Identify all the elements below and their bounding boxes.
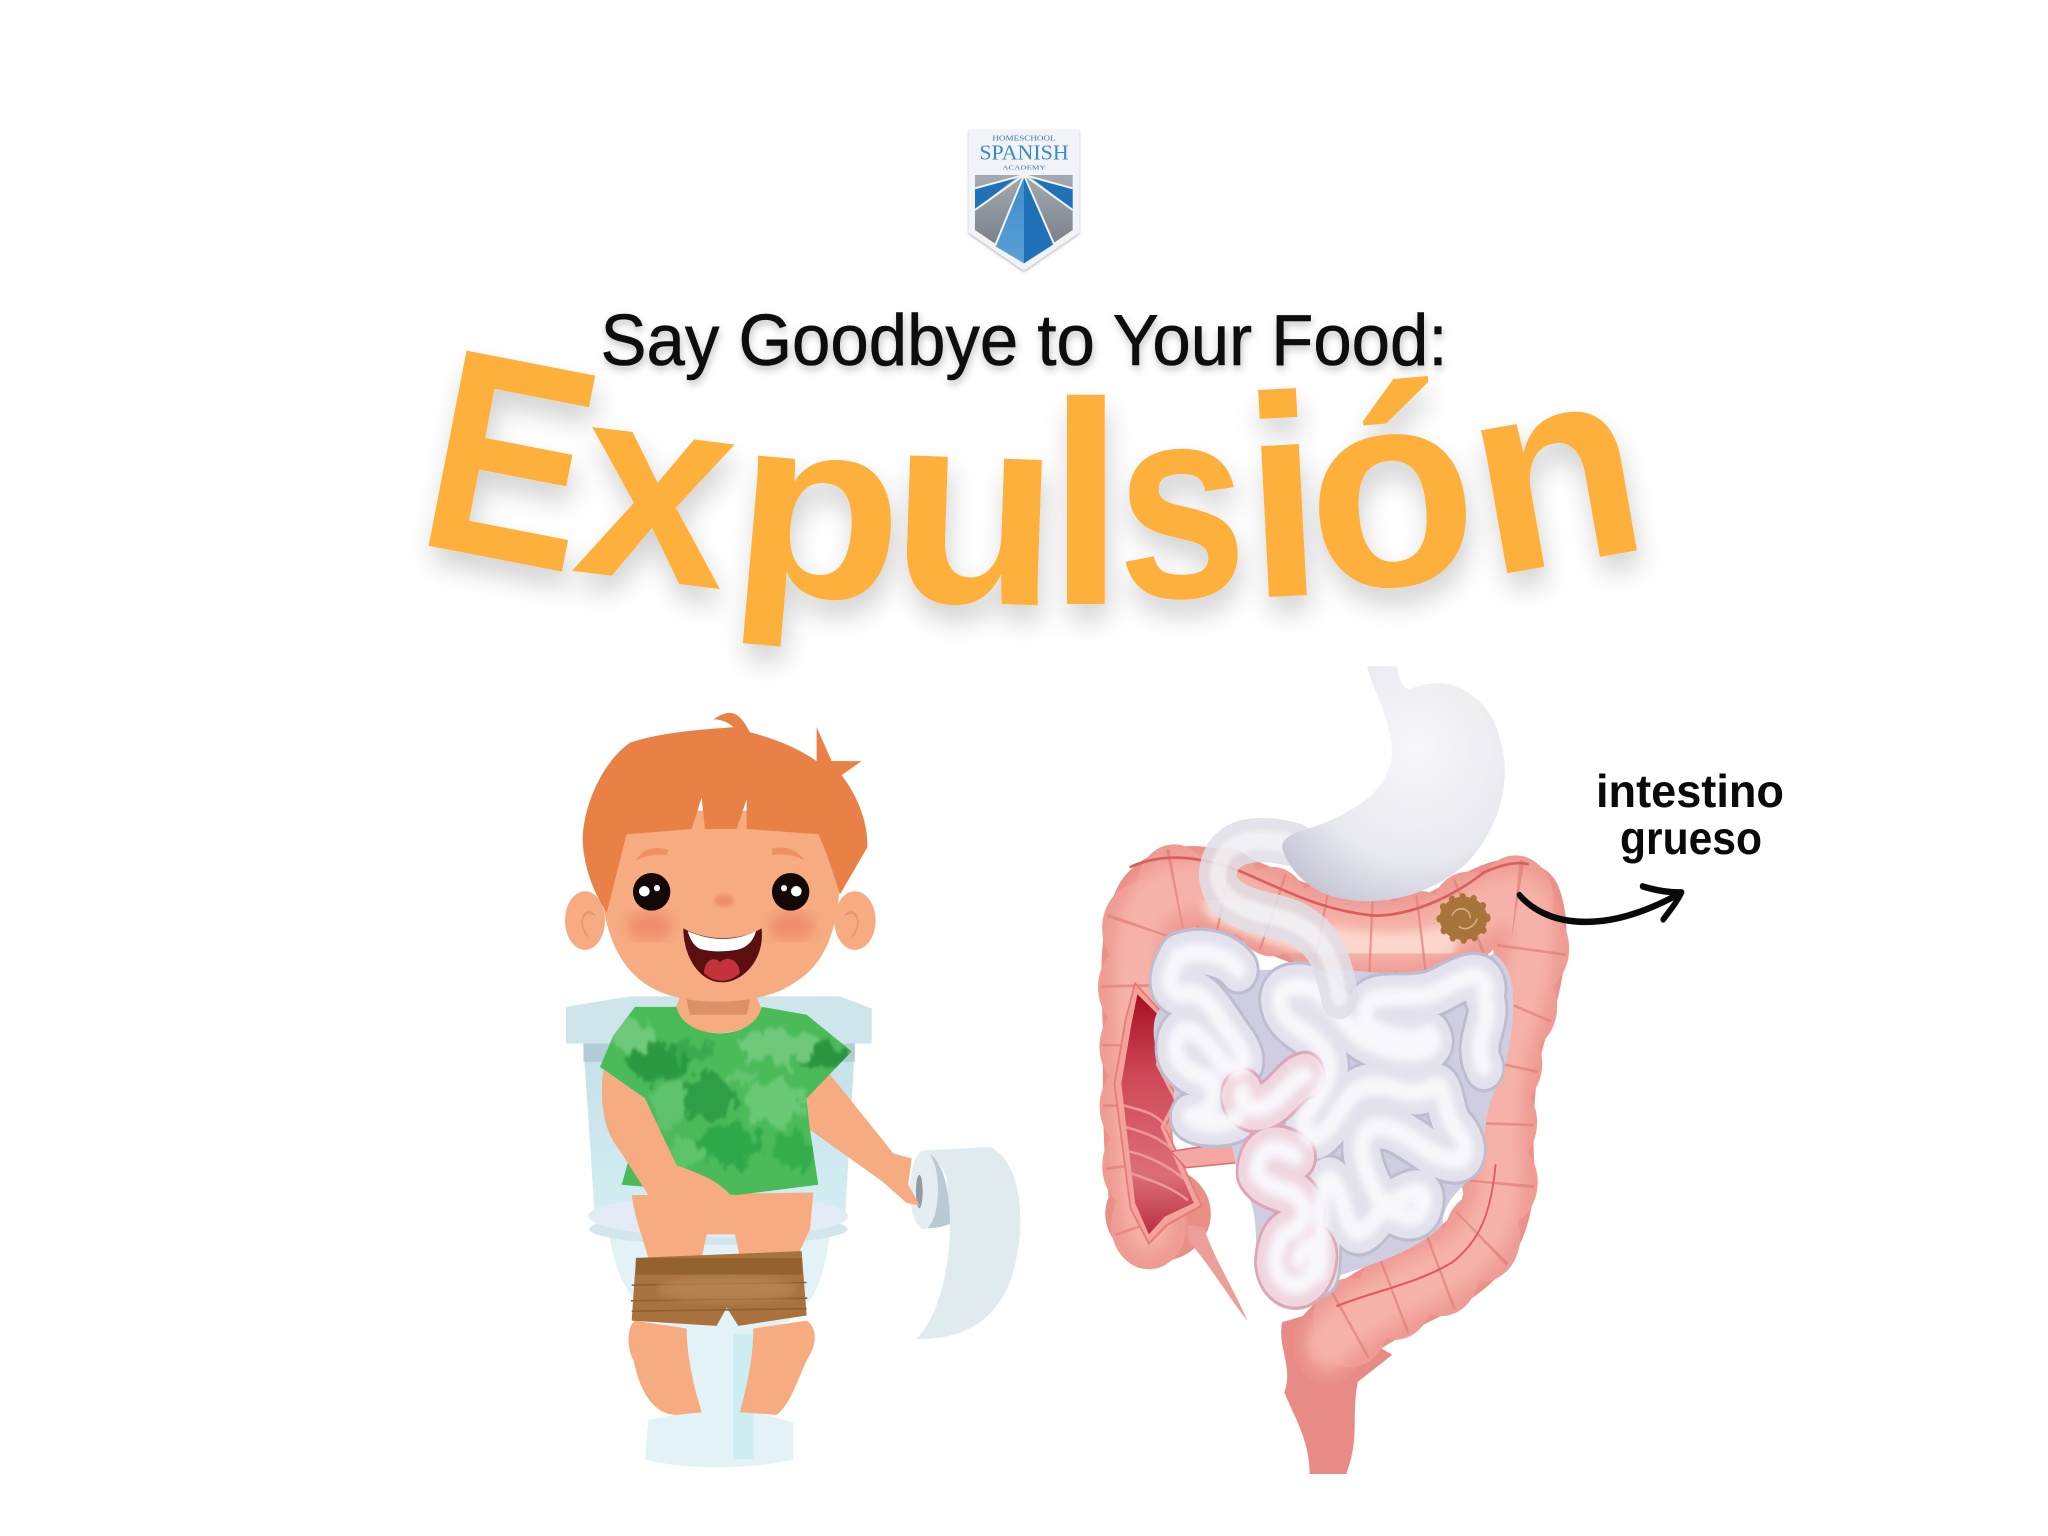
mouth	[683, 928, 762, 982]
neck	[675, 989, 762, 1033]
label: intestino grueso: intestino	[1596, 765, 1784, 817]
toilet	[566, 996, 872, 1467]
legs and feet	[632, 1193, 813, 1258]
title: Expulsión: i	[1236, 336, 1329, 659]
illustration: digestive system	[1105, 666, 1682, 1474]
subtitle: Say Goodbye to Your Food:	[600, 301, 1448, 381]
green shirt	[600, 1007, 853, 1195]
hair	[583, 713, 867, 913]
large intestine	[1105, 858, 1532, 1474]
title: Expulsión	[401, 287, 1664, 665]
left arm with hand	[602, 1070, 733, 1224]
logo: Homeschool Spanish Academy shield: HOMESCHOOL	[992, 134, 1056, 143]
logo: Homeschool Spanish Academy shield: ACADEMY	[1002, 165, 1046, 172]
illustration: boy on toilet	[565, 713, 1020, 1467]
food waste ball	[1440, 897, 1487, 940]
title: Expulsión: n	[1445, 303, 1664, 635]
appendix	[1188, 1225, 1248, 1321]
title: Expulsión: s	[1114, 348, 1249, 657]
toilet paper roll	[910, 1147, 1020, 1339]
logo: Homeschool Spanish Academy shield	[969, 129, 1079, 271]
eyes	[633, 873, 809, 911]
nose	[714, 894, 734, 907]
stomach	[1282, 666, 1505, 901]
label: intestino grueso: grueso	[1620, 812, 1762, 864]
title: Expulsión: ó	[1293, 325, 1488, 652]
ears	[565, 891, 605, 950]
duodenum over colon	[1218, 840, 1339, 997]
label: intestino grueso	[1596, 765, 1784, 864]
title: Expulsión: E	[401, 287, 621, 634]
ileum	[1171, 1141, 1242, 1168]
title: Expulsión: u	[886, 352, 1065, 665]
eyebrows	[636, 848, 805, 860]
title: Expulsión: p	[723, 359, 916, 659]
opened cecum	[1114, 983, 1202, 1244]
cheeks	[627, 912, 815, 939]
pointer arrow	[1519, 886, 1682, 922]
right arm	[807, 1072, 920, 1206]
title: Expulsión: l	[1048, 343, 1124, 665]
logo: Homeschool Spanish Academy shield: SPANISH	[979, 142, 1069, 164]
shorts	[631, 1251, 807, 1326]
face	[600, 811, 840, 1002]
small intestine	[1149, 940, 1513, 1308]
title: Expulsión: x	[563, 325, 754, 648]
